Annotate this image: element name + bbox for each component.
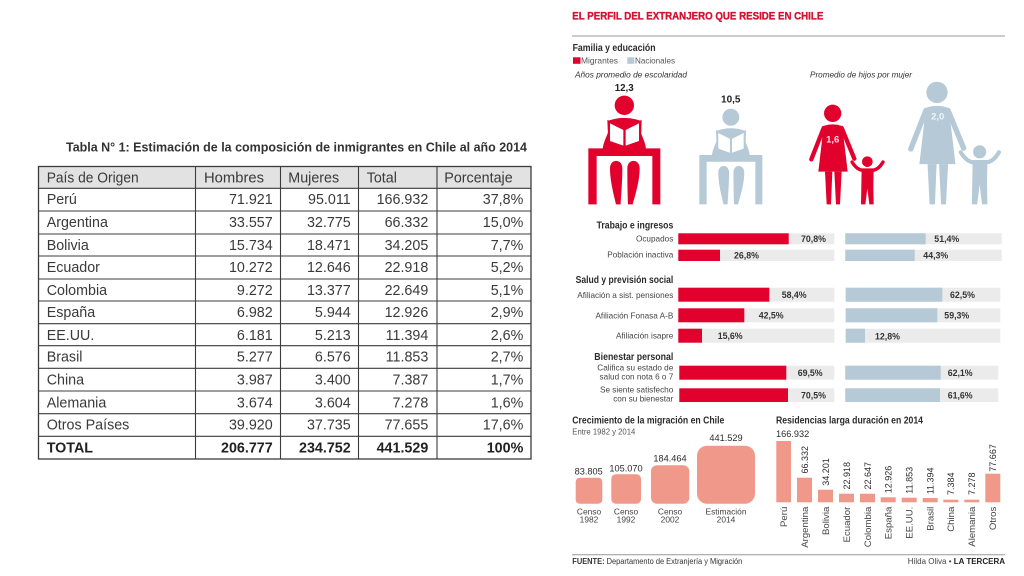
bar row: pension affiliation (577, 288, 1000, 302)
table header row: Mujeres (288, 170, 339, 186)
table row: Perú: 95.011 (308, 192, 351, 208)
table row: Alemania: 7.278 (393, 396, 428, 412)
icon: national reading at desk (699, 109, 762, 204)
bar row: Fonasa affiliation: Afiliación Fonasa A-B (595, 311, 674, 320)
author credit: Hilda Oliva • LA TERCERA (908, 557, 1005, 566)
table row: total: 441.529 (377, 440, 428, 456)
table row: Brasil: Brasil (47, 350, 82, 366)
bar row: pension affiliation: 62,5% (950, 290, 975, 300)
bar: Bolivia: 34.201 (821, 458, 831, 486)
title: table heading: Tabla N° 1: Estimación de la composición de inmigrantes en Chile al año 2014 (66, 140, 528, 155)
bar row: health rating: Califica su estado de (597, 364, 674, 373)
bar: Brasil: Brasil (926, 507, 936, 531)
legend: Migrantes (581, 57, 618, 66)
square: estimate 2014: 441.529 (709, 433, 743, 443)
subheading: date range: Entre 1982 y 2014 (572, 427, 636, 436)
heading: health and social security: Salud y previsión social (576, 275, 673, 286)
bar: Otros: Otros (988, 507, 999, 530)
bar: Alemania: Alemania (967, 506, 978, 547)
square: census 1982: 83.805 (575, 467, 603, 477)
table row: China: 1,7% (491, 373, 524, 389)
table row: EE.UU.: 11.394 (386, 328, 428, 344)
subheading: years of schooling: Años promedio de escolaridad (574, 71, 687, 80)
bar: Perú: Perú (779, 507, 790, 527)
panel: personal wellbeing (594, 352, 998, 404)
table row: Otros Países: 17,6% (483, 418, 524, 434)
bar row: satisfaction: 70,5% (801, 390, 826, 400)
panel: family and education (573, 43, 999, 204)
bar: China: 7.384 (946, 472, 956, 495)
table row: China: China (47, 373, 84, 389)
panel: long-term residencies bar chart (776, 416, 1000, 548)
table header row: País de Origen (47, 170, 139, 186)
table row: Argentina: 66.332 (385, 215, 428, 231)
bar: España: 12.926 (884, 466, 894, 493)
bar: Argentina (797, 446, 812, 548)
table row: Bolivia: 18.471 (307, 238, 351, 254)
table row: España: 6.982 (237, 305, 273, 321)
bar: Brasil: 11.394 (926, 467, 936, 494)
square: estimate 2014 (697, 433, 755, 524)
table row: Colombia: 9.272 (237, 283, 273, 299)
table row: EE.UU.: 5.213 (315, 328, 351, 344)
table row: China: 7.387 (393, 373, 428, 389)
panel: work and income (597, 220, 1002, 261)
bar row: health rating: 62,1% (948, 368, 973, 378)
table row: Perú: 37,8% (483, 192, 524, 208)
bar: Alemania (964, 472, 979, 547)
legend: Nacionales (635, 57, 675, 66)
bar row: Fonasa affiliation: 42,5% (759, 310, 784, 320)
bar row: inactive population: 26,8% (734, 250, 759, 260)
table row: total (47, 440, 524, 456)
square: census 1982: 1982 (580, 514, 599, 524)
table row: España: 5.944 (315, 305, 351, 321)
bar row: inactive population (607, 250, 1002, 261)
legend (573, 57, 675, 66)
bar row: employed (636, 233, 1002, 244)
table row: Otros Países (47, 418, 524, 434)
bar: Colombia: 22.647 (863, 462, 873, 490)
table row: China (47, 373, 524, 389)
bar row: satisfaction: con su bienestar (613, 395, 674, 404)
table row: Perú: 166.932 (377, 192, 428, 208)
bar row: inactive population: Población inactiva (607, 250, 674, 260)
square: census 1992: 1992 (617, 514, 636, 524)
bar: Ecuador: Ecuador (842, 506, 853, 542)
table row: Brasil: 11.853 (386, 350, 428, 366)
subheading: children per woman: Promedio de hijos por mujer (810, 71, 912, 80)
table row: Colombia: 13.377 (307, 283, 351, 299)
table row: Brasil: 5.277 (237, 350, 273, 366)
square: census 2002: 184.464 (653, 453, 687, 463)
bar row: isapre affiliation: Afiliación isapre (616, 332, 674, 341)
bar row: employed: Ocupados (636, 234, 673, 244)
bar row: health rating (597, 364, 998, 382)
bar: EE.UU.: 11.853 (904, 467, 914, 494)
bar row: health rating: salud con nota 6 o 7 (600, 372, 674, 382)
bar: España: España (884, 506, 894, 539)
table row: Colombia (47, 283, 524, 299)
table row: Ecuador: 12.646 (307, 260, 351, 276)
table header row: Total (367, 170, 397, 186)
title: infographic heading: EL PERFIL DEL EXTRANJERO QUE RESIDE EN CHILE (572, 10, 823, 22)
bar row: Fonasa affiliation (595, 308, 1000, 322)
table row: EE.UU.: EE.UU. (47, 328, 94, 344)
bar: Colombia (860, 462, 875, 547)
bar: Bolivia: Bolivia (821, 506, 832, 535)
bar row: isapre affiliation: 15,6% (718, 331, 743, 341)
icon: migrant mother and child (811, 105, 883, 204)
bar: Argentina: 66.332 (800, 446, 810, 474)
table header row: Hombres (204, 170, 264, 186)
bar: Alemania: 7.278 (967, 472, 977, 495)
bar row: Fonasa affiliation: 59,3% (944, 310, 969, 320)
table row: Otros Países: Otros Países (47, 418, 129, 434)
bar row: inactive population: 44,3% (923, 250, 948, 260)
table row: total: 206.777 (221, 440, 273, 456)
table row: España: 2,9% (491, 305, 524, 321)
bar row: isapre affiliation (616, 329, 1000, 343)
bar: Otros (985, 444, 1000, 530)
table row: China: 3.987 (237, 373, 273, 389)
table row: Alemania: 3.674 (237, 396, 273, 412)
table row: Argentina: 15,0% (483, 215, 524, 231)
table row: Perú (47, 192, 524, 208)
bar row: health rating: 69,5% (798, 368, 823, 378)
table row: Bolivia (47, 238, 524, 254)
table row: España (47, 305, 524, 321)
square: census 2002: Censo (658, 506, 682, 516)
table row: Otros Países: 77.655 (385, 418, 428, 434)
icon: national mother and child (911, 82, 999, 204)
square: census 1992 (609, 463, 643, 524)
table row: Ecuador (47, 260, 524, 276)
table row: total: TOTAL (47, 440, 93, 456)
table row: Ecuador: 5,2% (491, 260, 524, 276)
table row: Bolivia: 7,7% (491, 238, 524, 254)
bar: Otros: 77.667 (988, 444, 998, 472)
table row: EE.UU.: 6.181 (237, 328, 273, 344)
bar row: pension affiliation: Afiliación a sist. pensiones (577, 291, 673, 300)
value: nationals children: 2,0 (931, 112, 944, 122)
bar: EE.UU. (902, 467, 917, 539)
square: estimate 2014: Estimación (706, 506, 747, 516)
panel: migration growth chart (572, 416, 755, 524)
bar row: satisfaction (600, 386, 998, 404)
table row: Ecuador: 10.272 (229, 260, 273, 276)
table row: Alemania (47, 396, 524, 412)
bar: China (943, 472, 958, 532)
heading: family and education: Familia y educación (573, 43, 656, 54)
heading: migration growth: Crecimiento de la migración en Chile (572, 416, 725, 427)
square: census 2002: 2002 (661, 514, 680, 524)
bar: EE.UU.: EE.UU. (904, 507, 916, 539)
table row: Brasil: 6.576 (315, 350, 351, 366)
value: migrants schooling: 12,3 (615, 82, 634, 94)
table row: Colombia: Colombia (47, 283, 107, 299)
table row: Brasil: 2,7% (491, 350, 524, 366)
square: census 1982 (575, 467, 603, 524)
source credit: FUENTE: Departamento de Extranjería y Migración (572, 557, 742, 566)
bar row: satisfaction: 61,6% (948, 390, 973, 400)
table row: Argentina: 33.557 (229, 215, 273, 231)
bar: Colombia: Colombia (863, 506, 874, 547)
table row: Perú: Perú (47, 192, 77, 208)
table row: Otros Países: 39.920 (229, 418, 273, 434)
table row: Bolivia: Bolivia (47, 238, 89, 254)
square: census 2002 (651, 453, 689, 524)
square: census 1992: 105.070 (609, 463, 643, 473)
table row: Colombia: 22.649 (385, 283, 428, 299)
value: nationals schooling: 10,5 (721, 94, 741, 106)
square: census 1992: Censo (614, 506, 638, 516)
table row: Ecuador: 22.918 (385, 260, 428, 276)
square: census 1982: Censo (577, 506, 601, 516)
table row: Alemania: 1,6% (491, 396, 524, 412)
icon: migrant reading at desk (588, 96, 660, 204)
bar: Brasil (923, 467, 938, 531)
table row: España: 12.926 (385, 305, 428, 321)
heading: personal wellbeing: Bienestar personal (594, 352, 673, 363)
table header row (47, 170, 513, 186)
table row: Argentina (47, 215, 524, 231)
bar: Perú: 166.932 (776, 429, 809, 439)
table row: Bolivia: 15.734 (229, 238, 273, 254)
table row: Argentina: 32.775 (307, 215, 351, 231)
heading: long-term residencies: Residencias larga duración en 2014 (776, 416, 923, 427)
table row: Argentina: Argentina (47, 215, 108, 231)
table row: total: 234.752 (299, 440, 351, 456)
table row: Alemania: 3.604 (315, 396, 351, 412)
bar: España (881, 466, 896, 539)
heading: work and income: Trabajo e ingresos (597, 220, 674, 231)
bar: Argentina: Argentina (800, 506, 811, 548)
bar row: satisfaction: Se siente satisfecho (600, 386, 674, 395)
panel: immigrant composition table (38, 166, 531, 459)
bar: China: China (946, 506, 957, 532)
table row: Brasil (47, 350, 524, 366)
table row: total: 100% (487, 440, 524, 456)
bar row: pension affiliation: 58,4% (782, 290, 807, 300)
table row: España: España (47, 305, 95, 321)
bar: Ecuador (839, 462, 854, 542)
value: migrants children: 1,6 (826, 134, 839, 146)
table row: Ecuador: Ecuador (47, 260, 100, 276)
table row: Colombia: 5,1% (491, 283, 524, 299)
bar row: isapre affiliation: 12,8% (875, 332, 900, 342)
table row: Otros Países: 37.735 (307, 418, 351, 434)
table row: EE.UU.: 2,6% (491, 328, 524, 344)
bar row: employed: 51,4% (934, 234, 959, 244)
square: estimate 2014: 2014 (717, 514, 736, 524)
table header row: Porcentaje (444, 170, 513, 186)
table row: EE.UU. (47, 328, 524, 344)
table row: Bolivia: 34.205 (385, 238, 428, 254)
bar: Bolivia (818, 458, 833, 535)
table row: Alemania: Alemania (47, 396, 106, 412)
bar: Perú (776, 429, 809, 527)
panel: health and social security (576, 275, 1000, 343)
table row: China: 3.400 (315, 373, 351, 389)
bar row: employed: 70,8% (801, 234, 826, 244)
bar: Ecuador: 22.918 (842, 462, 852, 490)
table row: Perú: 71.921 (229, 192, 273, 208)
